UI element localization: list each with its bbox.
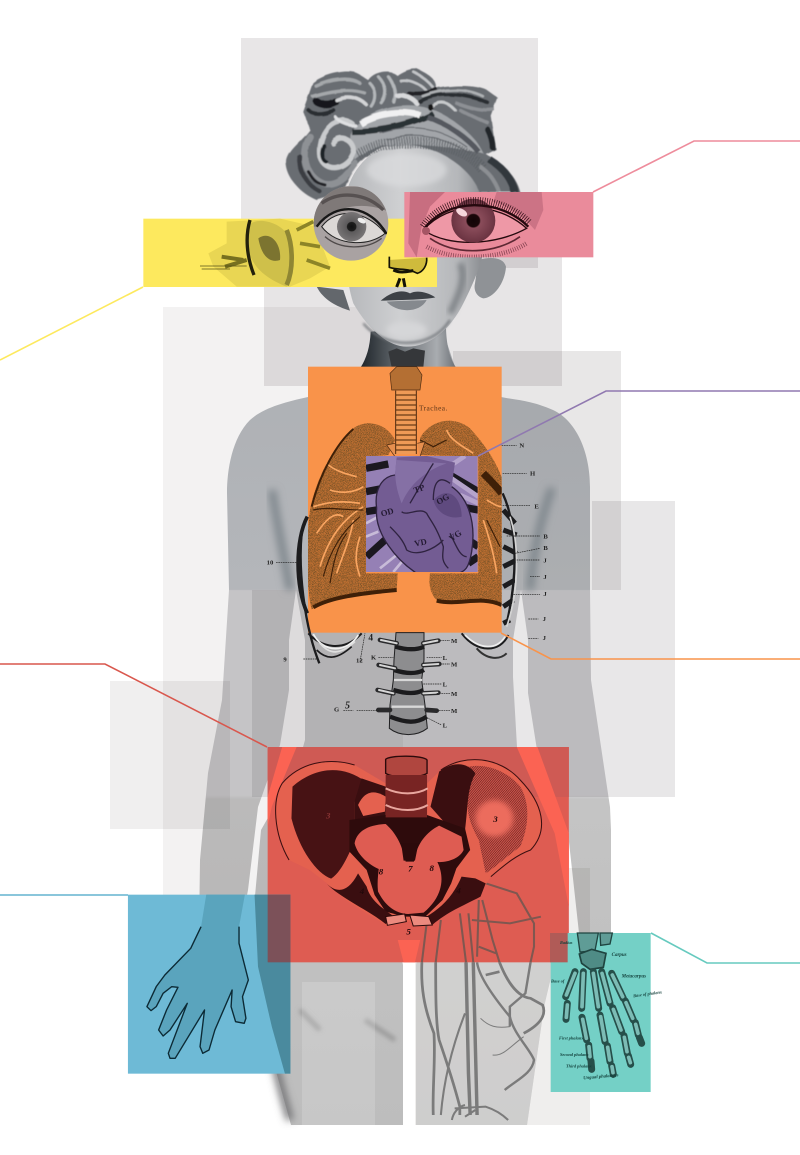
left ilium shadow: [291, 770, 366, 879]
figure labels: J: [543, 591, 547, 598]
pelvis numbers: [325, 811, 498, 936]
lips and chin: [363, 263, 463, 343]
trachea: [387, 367, 425, 457]
shading: armpits and chest: [256, 488, 552, 1120]
vertebrae: [386, 756, 427, 777]
line: red: [0, 664, 267, 747]
purple panel: heart: TP: [412, 482, 427, 495]
figure labels: J: [543, 616, 547, 623]
figure labels: L: [443, 723, 448, 730]
leader lines: [276, 445, 540, 725]
figure labels: M: [451, 691, 458, 698]
figure labels: L: [443, 655, 448, 662]
pelvic bone: [276, 756, 542, 927]
pelvis numbers: 4: [359, 886, 365, 896]
line: teal: [651, 933, 800, 963]
combed band: [350, 105, 485, 160]
bone captions: Base of: [550, 979, 565, 984]
line: blue: [0, 894, 128, 896]
pelvis numbers: 3: [492, 814, 498, 824]
figure labels: 10: [267, 560, 274, 567]
figure labels: 5: [345, 701, 350, 712]
ischium: [327, 873, 394, 924]
purple panel: heart: VG: [447, 528, 464, 543]
bone captions: Base of phalanx: [632, 989, 663, 998]
figure labels: E: [534, 503, 539, 510]
line: orange: [501, 633, 800, 659]
figure labels: M: [451, 638, 458, 645]
heart body: [376, 456, 473, 574]
sacral wings: [430, 764, 475, 830]
figure labels: J: [543, 557, 547, 564]
purple panel: heart: OD: [380, 506, 395, 519]
pelvis numbers: 8: [429, 863, 435, 873]
figure labels: J: [543, 574, 547, 581]
figure labels: G: [334, 707, 339, 714]
bone captions: Metacarpus: [621, 975, 646, 980]
figure labels: J: [543, 635, 547, 642]
figure labels: 9: [283, 657, 287, 664]
bone captions: Third phalanx: [566, 1064, 593, 1069]
bone captions: Radius: [560, 940, 573, 945]
figure labels: H: [530, 471, 536, 478]
bone captions: Carpus: [612, 953, 627, 958]
wrist and hand: [147, 895, 248, 1058]
figure labels: B: [543, 533, 548, 540]
face: [343, 143, 487, 347]
pelvis numbers: 5: [406, 926, 411, 936]
pink panel: eye: [404, 192, 593, 257]
callout lines: [0, 141, 800, 963]
figure labels: 4: [368, 634, 373, 644]
red panel: pelvis: [268, 747, 569, 962]
veins over the red panel: [422, 883, 541, 962]
figure labels: N: [519, 443, 524, 450]
top curls: [308, 72, 493, 148]
neck: [361, 328, 456, 367]
hair: [287, 68, 520, 200]
forearm ends and carpals: [577, 933, 612, 952]
bright strips where no body lies behind: [268, 747, 569, 962]
left ribs: [298, 517, 362, 663]
icon: nose: [388, 257, 427, 287]
larynx above the panel: [388, 348, 425, 367]
teal panel: hand bones: [550, 933, 663, 1092]
right ear: [475, 258, 506, 298]
figure labels: [267, 443, 548, 730]
figure labels: B: [543, 545, 548, 552]
pelvis numbers: 8: [379, 866, 384, 876]
icon: anatomical ear: [200, 219, 330, 287]
line: pink: [593, 141, 800, 192]
purple panel: heart: OG: [434, 491, 451, 507]
purple panel: heart: [366, 456, 478, 574]
bones: [566, 972, 642, 1074]
figure labels: 12: [356, 658, 363, 665]
figure labels: K: [371, 655, 377, 662]
bone captions: First phalanx: [559, 1036, 584, 1041]
trachea caption: Trachea.: [419, 403, 447, 412]
bun swirl: [300, 117, 355, 192]
pelvis numbers: 4: [455, 885, 461, 895]
round eye: [314, 186, 388, 261]
bone captions: Ungual phalanges: [583, 1073, 619, 1081]
left thigh lighter panel: [302, 982, 375, 1125]
pelvis numbers: 7: [408, 864, 413, 874]
right ribs: [462, 493, 517, 658]
blue panel: hand: [128, 895, 290, 1074]
figure labels: L: [443, 682, 448, 689]
ribs behind the heart: [366, 464, 478, 563]
yellow panel: ear and nose: [143, 219, 437, 287]
background panels: [110, 38, 675, 1125]
figure labels: M: [451, 661, 458, 668]
leg arteries: [422, 962, 544, 1120]
orange panel: lungs: [307, 367, 507, 633]
right thigh lighter tone: [416, 962, 556, 1125]
lungs: [307, 421, 507, 609]
bone captions: [550, 940, 663, 1081]
left hair tuft: [317, 287, 350, 311]
figure labels: M: [451, 708, 458, 715]
right hair side: [490, 160, 515, 193]
purple panel: heart: VD: [413, 536, 428, 549]
rib cage, spine and labels: [267, 443, 548, 735]
spine: [378, 633, 439, 735]
line: yellow: [0, 287, 143, 360]
right ilium hatching: [468, 766, 527, 873]
line: purple: [478, 391, 800, 456]
pelvis numbers: 3: [325, 811, 331, 821]
central pelvic ring: [349, 815, 470, 917]
head: statue bust: [287, 68, 520, 367]
body silhouette: [199, 340, 611, 1125]
bone captions: Second phalanx: [560, 1052, 590, 1057]
